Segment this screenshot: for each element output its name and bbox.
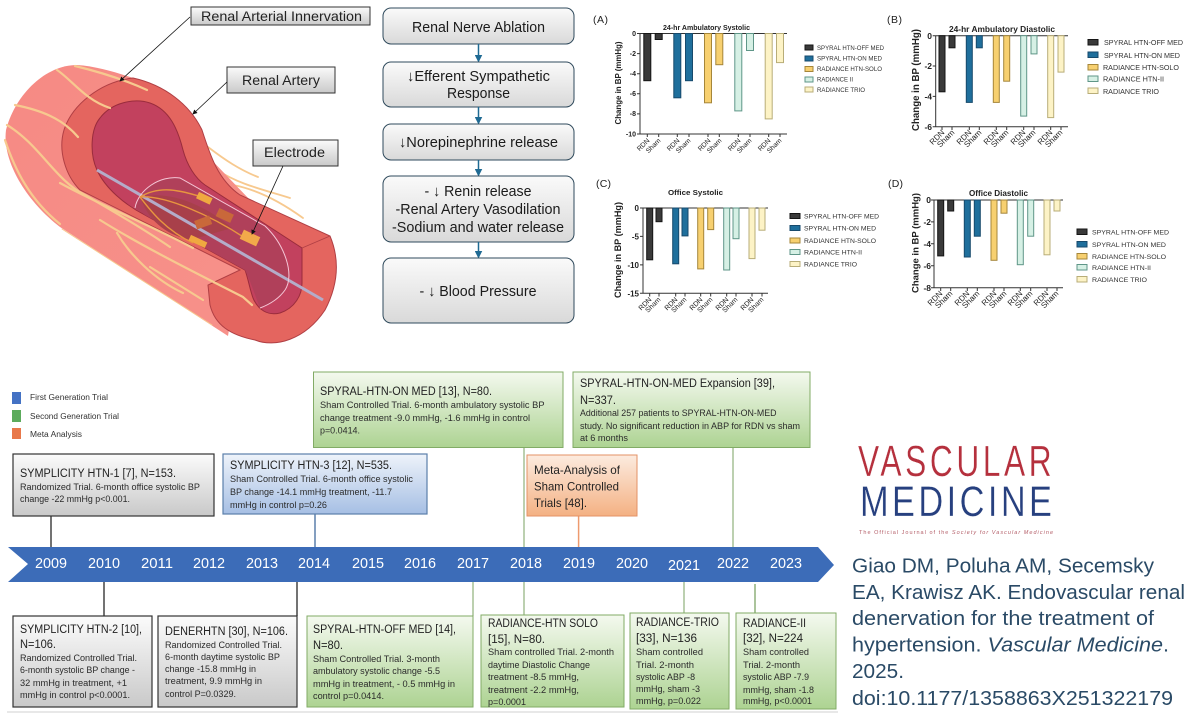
step: efferent sympathetic response: Response <box>447 85 510 102</box>
chart B: 24-hr ambulatory diastolic: -4 <box>924 92 932 102</box>
label: Renal Artery: Renal Artery <box>242 72 320 88</box>
label: Renal Artery <box>227 67 335 93</box>
card: SPYRAL-HTN-ON MED <box>314 372 563 448</box>
chart C: office systolic: Office Systolic <box>668 188 723 197</box>
chart D: office diastolic: Sham <box>987 289 1009 310</box>
chart A: 24-hr ambulatory systolic: RDN <box>757 137 772 153</box>
chart A: 24-hr ambulatory systolic: -10 <box>626 132 636 138</box>
step: renin, vasodilation, sodium <box>383 176 574 242</box>
timeline arrow with years: 2023 <box>770 555 802 572</box>
card: SPYRAL-HTN-OFF MED: control p=0.0414. <box>313 691 384 701</box>
legend B: RADIANCE TRIO <box>1103 89 1160 96</box>
chart A: 24-hr ambulatory systolic: Sham <box>645 137 663 155</box>
card: SYMPLICITY HTN-1: SYMPLICITY HTN-1 [7], N=153. <box>20 468 176 480</box>
chart A: 24-hr ambulatory systolic: Sham <box>706 137 724 155</box>
card: DENERHTN <box>158 616 297 707</box>
chart A: 24-hr ambulatory systolic: Sham <box>736 137 754 155</box>
timeline arrow with years: 2019 <box>563 555 595 572</box>
card: SYMPLICITY HTN-3: Sham Controlled Trial. 6-month office systolic <box>230 474 413 484</box>
card: SYMPLICITY HTN-2: 32 mmHg in treatment, +1 <box>20 678 127 688</box>
catheter shaft <box>97 170 323 300</box>
end face edge <box>302 236 330 248</box>
chart A: 24-hr ambulatory systolic: -2 <box>630 51 636 58</box>
step: renal nerve ablation <box>383 8 574 44</box>
timeline arrow with years: 2018 <box>510 555 542 572</box>
card: SPYRAL-HTN-ON-MED Expansion: study. No significant reduction in ABP for RDN vs sham <box>580 421 800 431</box>
citation: hypertension. Vascular Medicine . <box>852 635 1169 657</box>
chart C: office systolic: Sham <box>748 296 766 314</box>
chart B: 24-hr ambulatory diastolic: Sham <box>989 128 1011 149</box>
chart B: 24-hr ambulatory diastolic: (B) <box>887 14 902 26</box>
electrode wires <box>140 190 245 243</box>
card: SPYRAL-HTN-OFF MED: SPYRAL-HTN-OFF MED [14], <box>313 624 456 636</box>
timeline arrow with years: 2010 <box>88 555 120 572</box>
arrow: to electrode <box>252 166 283 234</box>
card: RADIANCE-II: Sham controlled <box>743 647 809 657</box>
nerves on the artery <box>5 66 252 325</box>
arrow: to renal artery <box>193 82 227 114</box>
artery wall <box>62 78 336 343</box>
nerves behind the artery <box>208 147 303 218</box>
timeline legend: Second Generation Trial <box>30 412 119 421</box>
legend A: SPYRAL HTN-ON MED <box>817 56 882 62</box>
chart A: 24-hr ambulatory systolic: 0 <box>632 31 636 38</box>
card: RADIANCE-II: RADIANCE-II <box>743 618 806 630</box>
chart B: 24-hr ambulatory diastolic: Sham <box>1043 128 1065 149</box>
arrow <box>478 242 480 257</box>
chart C: office systolic: RDN <box>638 296 653 312</box>
card: RADIANCE-HTN SOLO: p=0.0001 <box>488 697 526 707</box>
chart C: office systolic: Sham <box>671 296 689 314</box>
timeline arrow with years: 2011 <box>141 555 173 572</box>
chart C: office systolic: -5 <box>632 232 640 242</box>
journal logo: Vascular Medicine: The Official Journal of the Society for Vascular Medicine <box>859 530 1053 536</box>
legend A <box>805 45 884 94</box>
card: RADIANCE-TRIO: systolic ABP -8 <box>636 672 695 682</box>
card: SPYRAL-HTN-OFF MED: N=80. <box>313 640 343 652</box>
card: Meta-Analysis: Trials [48]. <box>534 496 587 510</box>
step: renin, vasodilation, sodium: - ↓ Renin release <box>424 183 532 200</box>
card: RADIANCE-HTN SOLO: treatment -8.5 mmHg, <box>488 672 579 682</box>
chart D: office diastolic: Sham <box>933 289 955 310</box>
chart D: office diastolic: -2 <box>923 217 931 227</box>
chart C: office systolic: -15 <box>627 290 640 298</box>
label: Electrode <box>253 140 338 166</box>
card: DENERHTN: control P=0.0329. <box>165 689 236 699</box>
chart B: 24-hr ambulatory diastolic: RDN <box>928 128 947 147</box>
card: DENERHTN: Randomized Controlled Trial. <box>165 640 282 650</box>
timeline arrow with years: 2017 <box>457 555 489 572</box>
card: RADIANCE-HTN SOLO: RADIANCE-HTN SOLO <box>488 618 598 630</box>
chart A: 24-hr ambulatory systolic: RDN <box>666 137 681 153</box>
chart C: office systolic: -10 <box>627 261 640 270</box>
card: RADIANCE-II: mmHg, sham -1.8 <box>743 685 814 695</box>
catheter basket <box>135 178 289 308</box>
card: Meta-Analysis: Meta-Analysis of <box>534 463 621 477</box>
legend C: RADIANCE TRIO <box>804 262 857 268</box>
chart C: office systolic: (C) <box>596 178 611 190</box>
citation: Giao DM, Poluha AM, Secemsky <box>852 556 1154 578</box>
card: DENERHTN: DENERHTN [30], N=106. <box>165 626 288 638</box>
card: SPYRAL-HTN-ON MED: change treatment -9.0 mmHg, -1.6 mmHg in control <box>320 413 530 423</box>
card: SPYRAL-HTN-ON-MED Expansion: SPYRAL-HTN-ON-MED Expansion [39], <box>580 378 775 390</box>
card: SPYRAL-HTN-ON-MED Expansion: at 6 months <box>580 433 629 443</box>
card: SYMPLICITY HTN-3: BP change -14.1 mmHg treatment, -11.7 <box>230 487 392 497</box>
timeline arrow with years: 2016 <box>404 555 436 572</box>
card: DENERHTN: 6-month daytime systolic BP <box>165 652 280 662</box>
chart B: 24-hr ambulatory diastolic: -6 <box>924 122 932 132</box>
chart A: 24-hr ambulatory systolic: Sham <box>675 137 693 155</box>
card: RADIANCE-HTN SOLO <box>481 615 624 707</box>
legend C <box>790 214 879 268</box>
legend D: RADIANCE HTN-II <box>1092 265 1151 272</box>
card: SYMPLICITY HTN-2 <box>13 616 152 707</box>
legend C: SPYRAL HTN-ON MED <box>804 226 876 232</box>
citation: EA, Krawisz AK. Endovascular renal <box>852 582 1185 604</box>
card: SYMPLICITY HTN-3: mmHg in control p=0.26 <box>230 500 327 510</box>
timeline arrow with years: 2013 <box>246 555 278 572</box>
card: SYMPLICITY HTN-1: Randomized Trial. 6-month office systolic BP <box>20 482 200 492</box>
balloon interior shading <box>135 178 289 308</box>
card: RADIANCE-TRIO <box>630 613 729 709</box>
chart A: 24-hr ambulatory systolic <box>593 14 884 155</box>
card: SPYRAL-HTN-ON MED: Sham Controlled Trial. 6-month ambulatory systolic BP <box>320 400 544 410</box>
timeline arrow with years: 2012 <box>193 555 225 572</box>
chart B: 24-hr ambulatory diastolic: Sham <box>1016 128 1038 149</box>
chart A: 24-hr ambulatory systolic: 24-hr Ambulatory Systolic <box>663 23 750 32</box>
electrodes <box>188 192 260 248</box>
chart C: office systolic: RDN <box>715 296 730 312</box>
chart B: 24-hr ambulatory diastolic: 24-hr Ambulatory Diastolic <box>949 24 1055 34</box>
chart B: 24-hr ambulatory diastolic: RDN <box>1009 128 1028 147</box>
legend B: SPYRAL HTN-ON MED <box>1104 53 1180 60</box>
chart A: 24-hr ambulatory systolic: -4 <box>630 71 636 78</box>
card: SYMPLICITY HTN-1 <box>13 454 214 516</box>
journal logo: Vascular Medicine: VASCULAR <box>858 437 1052 486</box>
chart D: office diastolic: RDN <box>980 289 999 308</box>
arrow <box>478 44 480 61</box>
legend D: SPYRAL HTN-ON MED <box>1092 242 1166 249</box>
card: SPYRAL-HTN-ON-MED Expansion <box>573 372 810 448</box>
step: norepinephrine release: ↓Norepinephrine release <box>399 134 558 151</box>
artery lumen <box>92 101 302 314</box>
card: RADIANCE-II: [32], N=224 <box>743 633 804 645</box>
chart A: 24-hr ambulatory systolic: -6 <box>630 91 636 98</box>
card: SYMPLICITY HTN-3: SYMPLICITY HTN-3 [12], N=535. <box>230 460 392 472</box>
chart B: 24-hr ambulatory diastolic <box>887 14 1183 149</box>
timeline arrow with years: 2022 <box>717 555 749 572</box>
chart D: office diastolic: -8 <box>923 283 931 293</box>
label: Electrode: Electrode <box>264 144 325 160</box>
legend B <box>1088 40 1183 96</box>
chart D: office diastolic: RDN <box>953 289 972 308</box>
step: norepinephrine release <box>383 124 574 160</box>
card: SYMPLICITY HTN-3 <box>223 454 427 514</box>
card: RADIANCE-TRIO: Sham controlled <box>636 647 703 657</box>
chart C: office systolic <box>596 178 879 314</box>
artery outer surface <box>6 65 250 336</box>
card: RADIANCE-II: systolic ABP -7.9 <box>743 672 809 682</box>
chart D: office diastolic: Office Diastolic <box>969 189 1029 198</box>
connectors to timeline <box>51 447 755 616</box>
card: SYMPLICITY HTN-2: Randomized Controlled Trial. <box>20 653 137 663</box>
step: renin, vasodilation, sodium: -Renal Artery Vasodilation <box>396 201 560 218</box>
chart D: office diastolic: Sham <box>1013 289 1035 310</box>
card: SPYRAL-HTN-OFF MED: Sham Controlled Trial. 3-month <box>313 654 440 664</box>
legend C: RADIANCE HTN-II <box>804 250 862 256</box>
step: renal nerve ablation: Renal Nerve Ablation <box>412 19 545 36</box>
chart D: office diastolic: RDN <box>1006 289 1025 308</box>
chart A: 24-hr ambulatory systolic: RDN <box>697 137 712 153</box>
chart B: 24-hr ambulatory diastolic: Sham <box>962 128 984 149</box>
chart A: 24-hr ambulatory systolic: Change in BP (mmHg) <box>613 41 623 124</box>
card: Meta-Analysis: Sham Controlled <box>534 480 619 494</box>
chart A: 24-hr ambulatory systolic: Sham <box>766 137 784 155</box>
legend D <box>1077 229 1169 284</box>
chart A: 24-hr ambulatory systolic: (A) <box>593 14 608 26</box>
card: DENERHTN: change -15.8 mmHg in <box>165 664 256 674</box>
chart D: office diastolic: RDN <box>1032 289 1051 308</box>
card: RADIANCE-II: Trial. 2-month <box>743 660 800 670</box>
chart C: office systolic: RDN <box>740 296 755 312</box>
fan of wires shading <box>140 195 232 240</box>
chart B: 24-hr ambulatory diastolic: RDN <box>1036 128 1055 147</box>
chart D: office diastolic: RDN <box>926 289 945 308</box>
card: Meta-Analysis <box>527 455 637 516</box>
citation: 2025. <box>852 661 904 683</box>
card: SPYRAL-HTN-ON-MED Expansion: N=337. <box>580 395 616 407</box>
chart C: office systolic: 0 <box>635 204 640 213</box>
card: SYMPLICITY HTN-2: mmHg in control p<0.0001. <box>20 690 130 700</box>
timeline arrow with years: 2014 <box>298 555 330 572</box>
card: SPYRAL-HTN-OFF MED: ambulatory systolic change -5.5 <box>313 666 440 676</box>
legend D: SPYRAL HTN-OFF MED <box>1092 230 1169 236</box>
step: renin, vasodilation, sodium: -Sodium and water release <box>392 219 564 236</box>
chart D: office diastolic: Sham <box>1039 289 1061 310</box>
citation <box>852 556 1185 710</box>
card: SPYRAL-HTN-ON-MED Expansion: Additional 257 patients to SPYRAL-HTN-ON-MED <box>580 408 777 418</box>
card: SPYRAL-HTN-OFF MED <box>307 616 473 707</box>
timeline legend <box>12 392 119 439</box>
chart D: office diastolic <box>888 178 1169 310</box>
chart A: 24-hr ambulatory systolic: RDN <box>727 137 742 153</box>
journal logo: Vascular Medicine: MEDICINE <box>860 478 1052 526</box>
chart D: office diastolic: -4 <box>923 239 931 249</box>
arrow <box>478 107 480 123</box>
timeline arrow with years <box>8 547 834 582</box>
card: RADIANCE-II <box>736 613 836 709</box>
chart D: office diastolic: Change in BP (mmHg) <box>910 193 922 293</box>
step: blood pressure: - ↓ Blood Pressure <box>420 283 536 300</box>
step: efferent sympathetic response <box>383 62 574 107</box>
card: RADIANCE-TRIO: RADIANCE-TRIO <box>636 617 719 629</box>
card: SPYRAL-HTN-OFF MED: mmHg in treatment, - 0.5 mmHg in <box>313 679 455 689</box>
chart D: office diastolic: Sham <box>960 289 982 310</box>
legend C: SPYRAL HTN-OFF MED <box>804 214 879 220</box>
chart D: office diastolic: (D) <box>888 178 903 190</box>
card: RADIANCE-TRIO: Trial. 2-month <box>636 660 694 670</box>
chart C: office systolic: Sham <box>697 296 715 314</box>
timeline arrow with years: 2009 <box>35 555 67 572</box>
legend A: SPYRAL HTN-OFF MED <box>817 45 884 52</box>
card: SPYRAL-HTN-ON MED: p=0.0414. <box>320 426 360 436</box>
timeline legend: Meta Analysis <box>30 430 82 439</box>
card: RADIANCE-TRIO: mmHg, p=0.022 <box>636 696 701 706</box>
chart C: office systolic: RDN <box>689 296 704 312</box>
legend B: RADIANCE HTN-II <box>1103 76 1164 84</box>
step: blood pressure <box>383 258 574 323</box>
chart B: 24-hr ambulatory diastolic: 0 <box>927 31 932 41</box>
chart B: 24-hr ambulatory diastolic: RDN <box>955 128 974 147</box>
legend A: RADIANCE II <box>817 76 853 84</box>
citation: doi:10.1177/1358863X251322179 <box>852 688 1173 710</box>
chart D: office diastolic: -6 <box>923 261 931 271</box>
step: efferent sympathetic response: ↓Efferent Sympathetic <box>407 68 550 85</box>
card: SYMPLICITY HTN-1: change -22 mmHg p<0.001. <box>20 494 130 504</box>
card: DENERHTN: treatment, 9.9 mmHg in <box>165 676 262 686</box>
chart C: office systolic: Sham <box>722 296 740 314</box>
card: SYMPLICITY HTN-2: N=106. <box>20 639 56 651</box>
timeline arrow with years: 2021 <box>668 557 700 574</box>
card: RADIANCE-II: mmHg, p<0.0001 <box>743 696 812 706</box>
timeline arrow with years: 2020 <box>616 555 648 572</box>
card: SPYRAL-HTN-ON MED: SPYRAL-HTN-ON MED [13], N=80. <box>320 386 492 398</box>
card: RADIANCE-TRIO: [33], N=136 <box>636 633 697 645</box>
arrow <box>478 160 480 175</box>
arrow: to innervation <box>120 17 190 81</box>
timeline legend: First Generation Trial <box>30 393 108 402</box>
card: RADIANCE-HTN SOLO: treatment -2.2 mmHg, <box>488 685 579 695</box>
legend B: SPYRAL HTN-OFF MED <box>1104 40 1183 47</box>
journal logo: Vascular Medicine <box>858 437 1053 536</box>
legend C: RADIANCE HTN-SOLO <box>804 238 876 245</box>
chart B: 24-hr ambulatory diastolic: -2 <box>924 61 932 71</box>
legend D: RADIANCE TRIO <box>1092 277 1147 284</box>
label: Renal Arterial Innervation: Renal Arterial Innervation <box>201 8 362 24</box>
chart C: office systolic: Change in BP (mmHg) <box>613 202 623 298</box>
illustration: renal artery with catheter <box>5 65 336 343</box>
chart D: office diastolic: 0 <box>926 195 931 205</box>
card: RADIANCE-HTN SOLO: daytime Diastolic Change <box>488 660 590 670</box>
card: RADIANCE-HTN SOLO: Sham controlled Trial. 2-month <box>488 647 614 657</box>
legend A: RADIANCE HTN-SOLO <box>817 66 882 73</box>
chart A: 24-hr ambulatory systolic: -8 <box>630 111 636 118</box>
card: RADIANCE-TRIO: mmHg, sham -3 <box>636 684 700 694</box>
chart B: 24-hr ambulatory diastolic: Sham <box>935 128 957 149</box>
chart B: 24-hr ambulatory diastolic: Change in BP (mmHg) <box>911 29 922 131</box>
chart C: office systolic: RDN <box>664 296 679 312</box>
card: SYMPLICITY HTN-2: SYMPLICITY HTN-2 [10], <box>20 624 142 636</box>
timeline arrow with years: 2015 <box>352 555 384 572</box>
legend A: RADIANCE TRIO <box>817 87 865 94</box>
legend B: RADIANCE HTN-SOLO <box>1103 65 1180 72</box>
legend D: RADIANCE HTN-SOLO <box>1092 254 1166 261</box>
chart C: office systolic: Sham <box>645 296 663 314</box>
chart A: 24-hr ambulatory systolic: RDN <box>636 137 651 153</box>
chart B: 24-hr ambulatory diastolic: RDN <box>982 128 1001 147</box>
citation: denervation for the treatment of <box>852 608 1154 630</box>
card: SYMPLICITY HTN-2: 6-month systolic BP change - <box>20 665 135 675</box>
card: RADIANCE-HTN SOLO: [15], N=80. <box>488 634 545 646</box>
flowchart: mechanism <box>383 8 574 323</box>
